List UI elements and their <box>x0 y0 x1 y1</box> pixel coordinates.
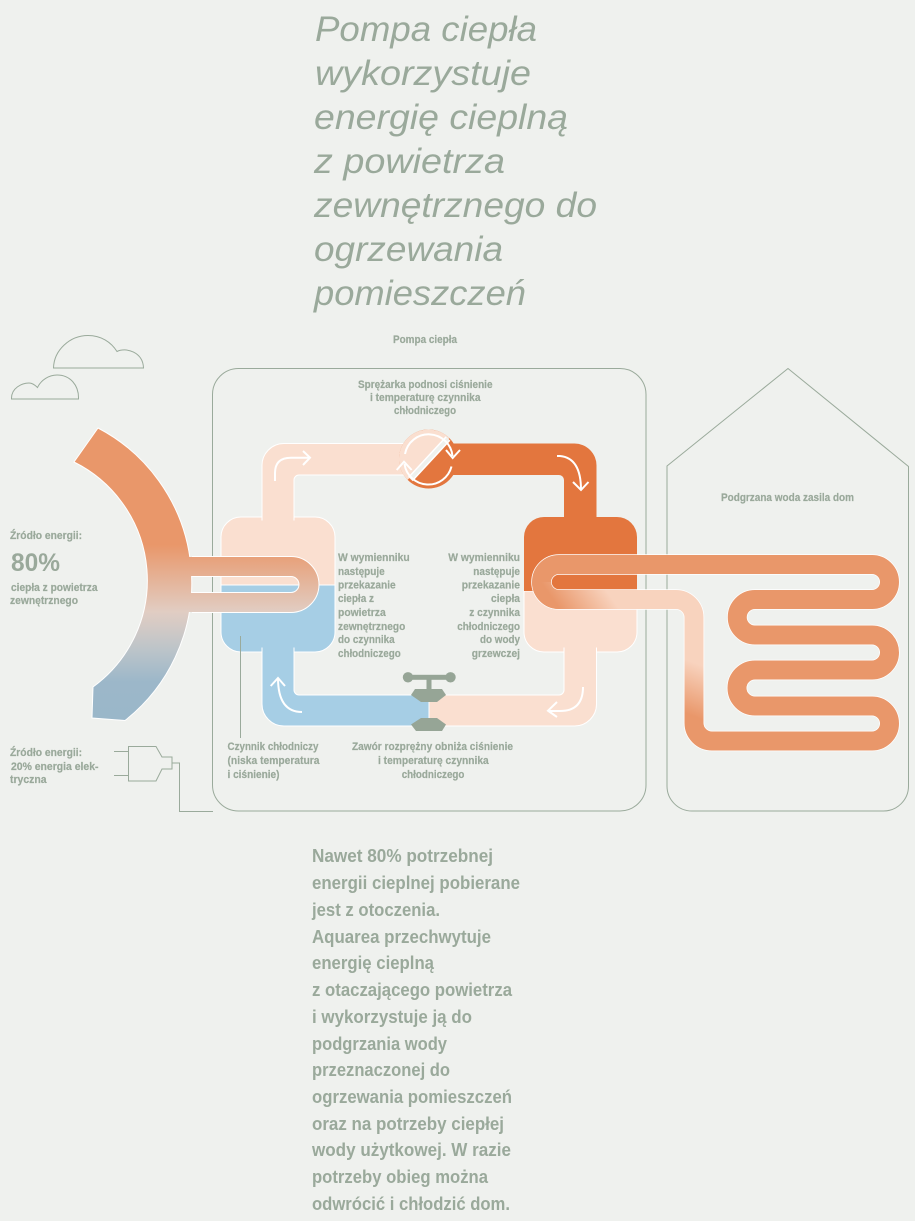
body text: jest z otoczenia. <box>311 900 440 920</box>
label: refrigerant: (niska temperatura <box>228 755 320 767</box>
left heat exchanger <box>221 517 335 652</box>
arrow: bottom right flow <box>548 687 583 717</box>
right heat exchanger <box>524 517 637 652</box>
icon: expansion valve <box>403 672 456 731</box>
label: compressor <box>358 379 492 417</box>
title: ogrzewania <box>314 230 503 269</box>
body text: wody użytkowej. W razie <box>311 1140 511 1160</box>
pipe: return section down to coil <box>639 600 713 741</box>
label: compressor: Sprężarka podnosi ciśnienie <box>358 379 492 391</box>
title <box>313 10 597 313</box>
pipe: heating coil <box>542 564 890 741</box>
pipe: warm liquid <box>429 648 596 726</box>
label: left heat exchanger: zewnętrznego <box>338 621 406 633</box>
label: energy source 20% <box>10 746 99 786</box>
heat pump heading: Pompa ciepła <box>393 334 458 346</box>
body text: oraz na potrzeby ciepłej <box>312 1114 504 1134</box>
label: energy source 80% <box>10 529 98 607</box>
arrow: top right flow <box>557 456 588 490</box>
label: refrigerant <box>228 741 320 781</box>
icon: large cloud <box>54 336 144 368</box>
pipe: return section near exchanger <box>542 582 640 600</box>
label: energy source 20%: 20% energia elek- <box>11 761 99 773</box>
refrigerant circuit <box>221 429 637 731</box>
title: pomieszczeń <box>313 274 526 313</box>
label: right heat exchanger: grzewczej <box>472 648 520 660</box>
label: house: Podgrzana woda zasila dom <box>721 492 854 504</box>
label: left heat exchanger: W wymienniku <box>338 552 410 564</box>
pipe joints <box>262 512 596 657</box>
label: left heat exchanger: ciepła z <box>338 593 374 605</box>
label: expansion valve: chłodniczego <box>402 769 465 781</box>
body text: z otaczającego powietrza <box>312 980 513 1000</box>
body text: Aquarea przechwytuje <box>312 927 491 947</box>
body text: energii cieplnej pobierane <box>312 873 520 893</box>
body text: energię cieplną <box>312 953 435 973</box>
label: energy source 80%: ciepła z powietrza <box>11 582 98 594</box>
label: energy source 80%: zewnętrznego <box>10 595 78 607</box>
label: right heat exchanger: z czynnika <box>469 607 521 619</box>
label: left heat exchanger: chłodniczego <box>338 648 401 660</box>
label: left heat exchanger: powietrza <box>338 607 387 619</box>
pipe: cold liquid <box>262 648 429 726</box>
label: right heat exchanger: ciepła <box>491 593 521 605</box>
label: right heat exchanger: przekazanie <box>462 580 520 592</box>
label: left heat exchanger: następuje <box>338 566 385 578</box>
arrow: top left flow <box>275 451 310 481</box>
pipe outline <box>542 564 890 741</box>
panel: heat pump frame <box>212 368 646 811</box>
body text: przeznaczonej do <box>312 1060 450 1080</box>
label: refrigerant: i ciśnienie) <box>228 769 280 781</box>
label: expansion valve: Zawór rozprężny obniża ciśnienie <box>352 741 513 753</box>
body text: ogrzewania pomieszczeń <box>312 1087 512 1107</box>
body text: potrzeby obieg można <box>312 1167 489 1187</box>
label: energy source 20%: Źródło energii: <box>10 746 82 759</box>
label: compressor: i temperaturę czynnika <box>370 392 481 404</box>
body text: podgrzania wody <box>312 1034 447 1054</box>
pipe: low-temperature vapour <box>262 444 430 520</box>
label: expansion valve <box>352 741 513 781</box>
hot water pipe loop <box>542 564 890 741</box>
icon: electric plug <box>114 746 213 812</box>
outdoor air pipe loop <box>186 566 309 602</box>
title: wykorzystuje <box>315 54 531 93</box>
panel: house outline <box>667 368 908 811</box>
title: Pompa ciepła <box>315 10 537 49</box>
label: right heat exchanger: następuje <box>473 566 520 578</box>
label: left heat exchanger: przekazanie <box>338 580 396 592</box>
pipe: hot compressed vapour <box>428 443 597 520</box>
arrow: bottom left flow <box>271 678 302 712</box>
label: energy source 80%: 80% <box>11 549 60 577</box>
energy source arc <box>74 428 192 720</box>
label: left heat exchanger: do czynnika <box>338 634 395 646</box>
label: right heat exchanger: do wody <box>480 634 521 646</box>
icon: small cloud <box>11 375 79 399</box>
leader line: refrigerant <box>240 636 242 738</box>
label: refrigerant: Czynnik chłodniczy <box>228 741 319 753</box>
label: right heat exchanger: W wymienniku <box>448 552 520 564</box>
title: z powietrza <box>313 142 505 181</box>
icon: compressor <box>397 429 460 488</box>
label: energy source 20%: tryczna <box>10 774 47 786</box>
body text <box>311 846 520 1214</box>
label: right heat exchanger <box>448 552 521 660</box>
body text: i wykorzystuje ją do <box>312 1007 472 1027</box>
label: right heat exchanger: chłodniczego <box>457 621 520 633</box>
label: compressor: chłodniczego <box>394 405 456 417</box>
label: expansion valve: i temperaturę czynnika <box>378 755 490 767</box>
body text: Nawet 80% potrzebnej <box>312 846 493 866</box>
title: zewnętrznego do <box>313 186 597 225</box>
title: energię cieplną <box>314 98 568 137</box>
label: energy source 80%: Źródło energii: <box>10 529 82 542</box>
label: left heat exchanger <box>338 552 410 660</box>
body text: odwrócić i chłodzić dom. <box>312 1194 510 1214</box>
